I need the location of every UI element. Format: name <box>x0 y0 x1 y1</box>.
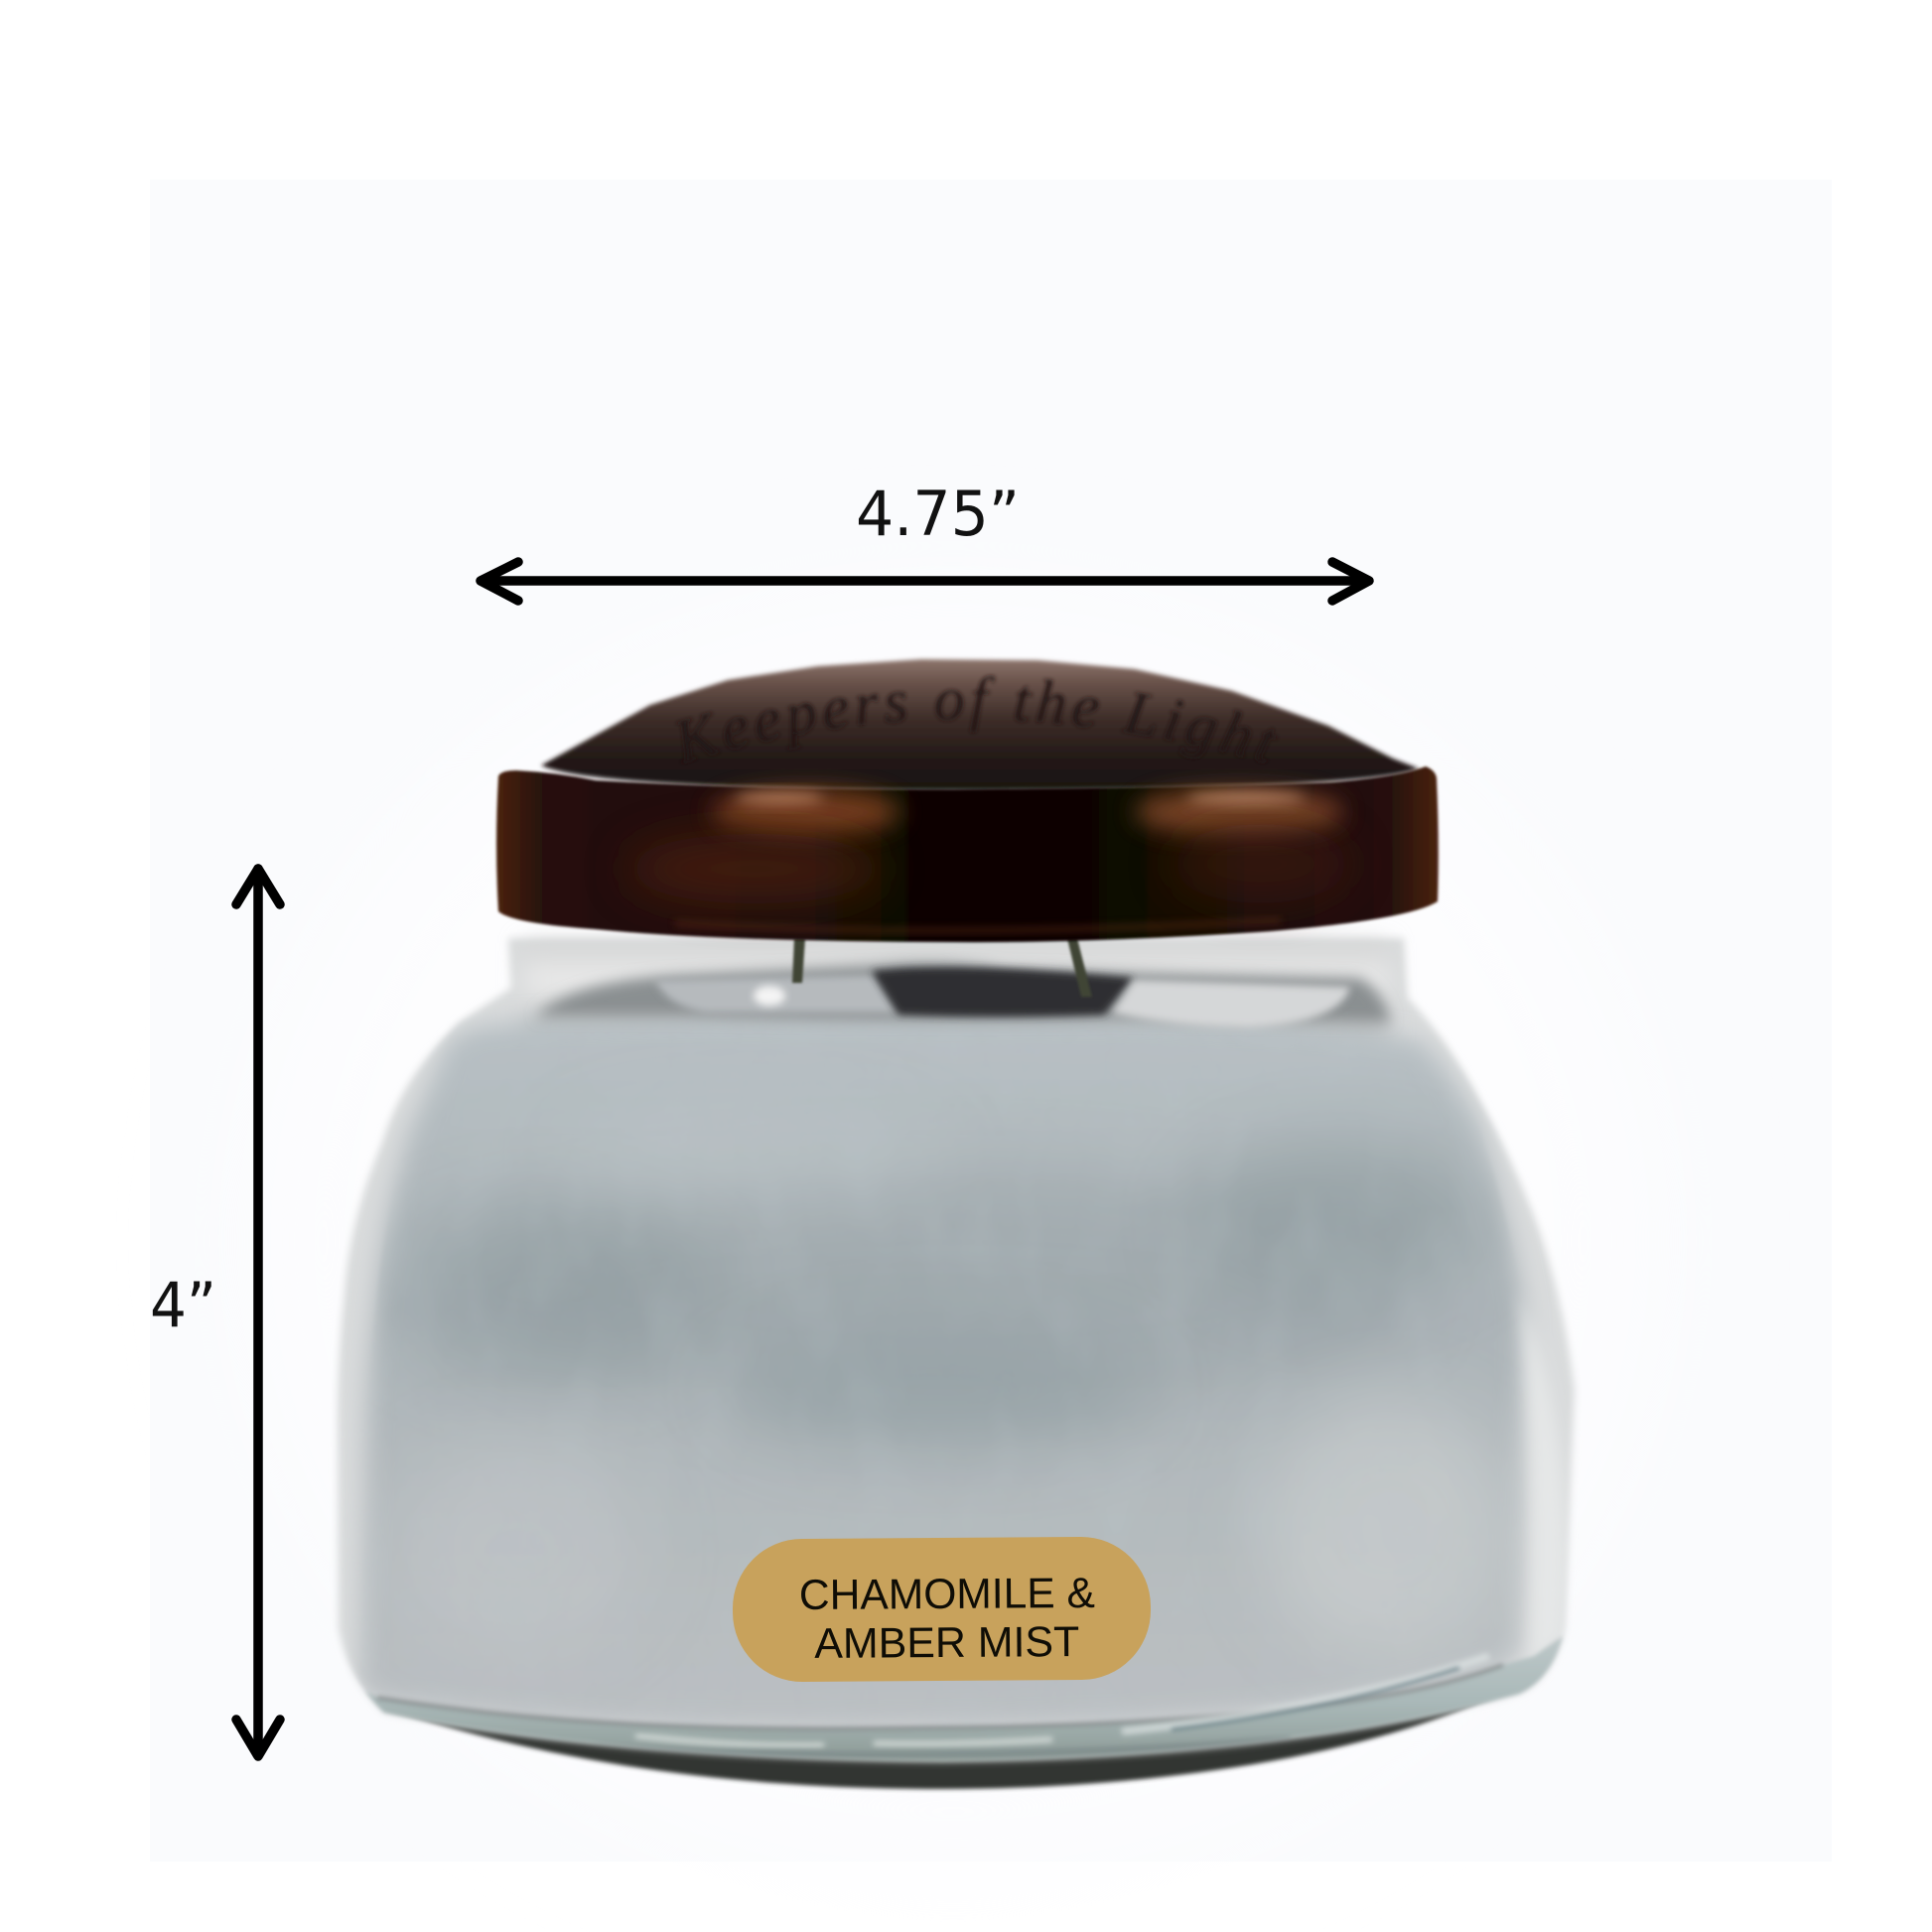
embossed lid text: Keepers of the Light <box>677 673 1277 759</box>
lid rim <box>496 766 1439 942</box>
width dimension arrow <box>481 562 1369 601</box>
height label: 4” <box>150 1269 216 1341</box>
infographic canvas <box>153 489 1579 1793</box>
glass neck <box>524 943 1388 1042</box>
rim highlights <box>712 788 900 836</box>
label text: AMBER MIST <box>814 1618 1079 1668</box>
lid dome <box>539 655 1420 790</box>
candle jar <box>335 655 1577 1793</box>
label text: CHAMOMILE & <box>799 1570 1095 1619</box>
jar shadow on surface <box>384 1672 1541 1789</box>
height dimension arrow <box>236 869 280 1756</box>
scent label <box>733 1537 1152 1682</box>
wick left <box>792 938 805 983</box>
glass base band <box>366 1636 1563 1763</box>
width label: 4.75” <box>856 478 1020 550</box>
glass jar body <box>338 938 1575 1761</box>
right-side glass edge <box>1517 1310 1563 1652</box>
wax fill <box>328 993 1588 1777</box>
wax surface seen through neck <box>536 962 1390 1028</box>
photo panel background <box>150 180 1832 1876</box>
wick right <box>1067 938 1092 997</box>
glass base streaks <box>377 1665 1503 1728</box>
